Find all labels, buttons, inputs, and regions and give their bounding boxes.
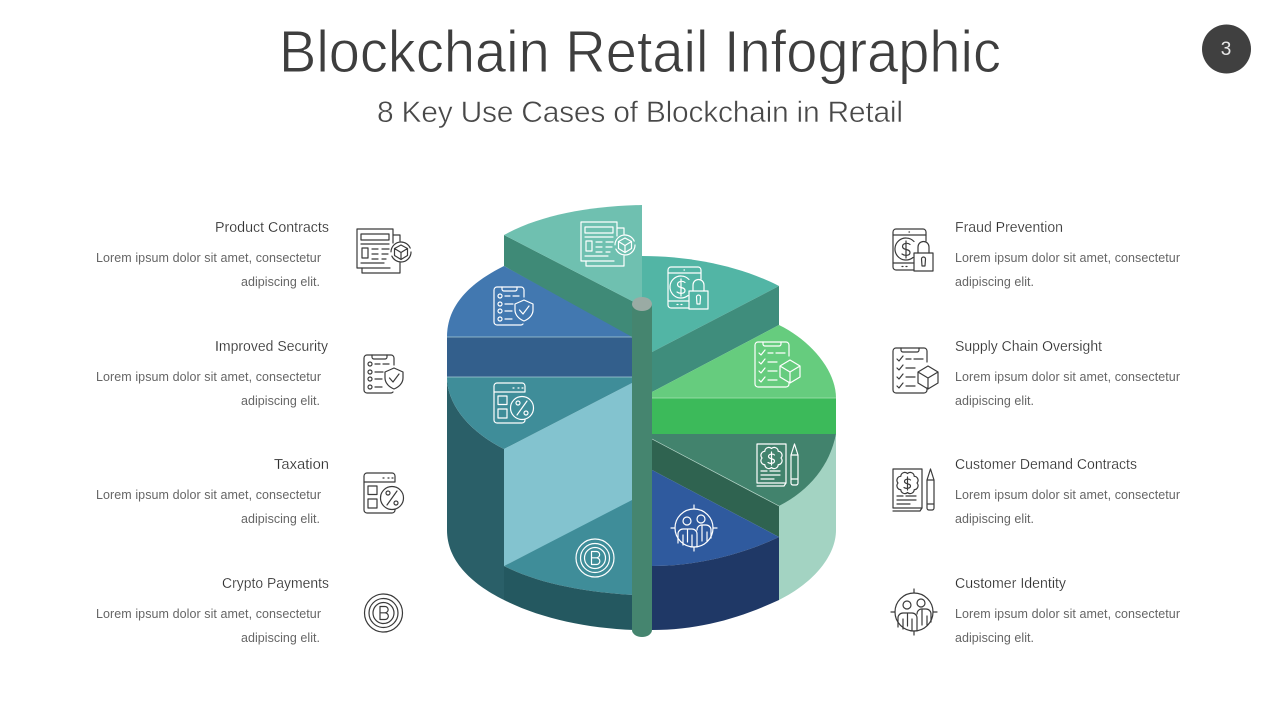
panel: product contracts: Product Contracts (215, 219, 329, 236)
panel: fraud prevention: Lorem ipsum dolor sit amet, consectetur (955, 251, 1180, 265)
segment: improved security (447, 266, 634, 377)
icon: improved security (364, 355, 403, 393)
panel: improved security: Improved Security (215, 338, 328, 355)
panel: customer identity: Customer Identity (955, 575, 1066, 592)
panel: customer identity: Lorem ipsum dolor sit amet, consectetur (955, 607, 1180, 621)
panel: customer demand contracts: Customer Demand Contracts (955, 456, 1137, 473)
page number badge (1202, 24, 1251, 74)
panel: product contracts: Lorem ipsum dolor sit amet, consectetur (96, 251, 321, 265)
panel: supply chain oversight: Lorem ipsum dolor sit amet, consectetur (955, 370, 1180, 384)
panel: supply chain oversight (955, 338, 1180, 408)
panel: crypto payments: Crypto Payments (222, 575, 329, 592)
panel: taxation: adipiscing elit. (241, 512, 320, 526)
segment: customer identity (652, 470, 779, 630)
icon: identity white (671, 505, 717, 551)
panel: improved security (96, 338, 328, 408)
central pillar (632, 297, 652, 637)
panel: customer demand contracts: Lorem ipsum dolor sit amet, consectetur (955, 488, 1180, 502)
panel: customer identity (955, 575, 1180, 645)
page number badge: 3 (1221, 39, 1231, 60)
icon: product contracts (357, 229, 411, 273)
panel: customer demand contracts (955, 456, 1180, 526)
icon: fraud white (668, 267, 708, 309)
panel: supply chain oversight: adipiscing elit. (955, 394, 1034, 408)
panel: crypto payments (96, 575, 329, 645)
icon: demand white (757, 444, 798, 486)
panel: 3D segmented cylinder (447, 205, 836, 637)
icon: contracts white (581, 222, 635, 266)
icon: taxation (364, 473, 404, 513)
segment: fraud prevention (642, 256, 779, 392)
segment: taxation (447, 377, 634, 449)
icon: crypto payments (364, 594, 402, 632)
icon: fraud prevention (893, 229, 933, 271)
panel: taxation: Taxation (274, 456, 329, 473)
panel: crypto payments: Lorem ipsum dolor sit amet, consectetur (96, 607, 321, 621)
panel: customer identity: adipiscing elit. (955, 631, 1034, 645)
icon: crypto white (576, 539, 614, 577)
panel: improved security: Lorem ipsum dolor sit amet, consectetur (96, 370, 321, 384)
panel: customer demand contracts: adipiscing elit. (955, 512, 1034, 526)
panel: fraud prevention (955, 219, 1180, 289)
segment: customer demand contracts (652, 434, 836, 600)
segment: product contracts (504, 205, 642, 338)
segment: supply chain oversight (652, 325, 836, 434)
subtitle: 8 Key Use Cases of Blockchain in Retail (377, 96, 903, 129)
panel: fraud prevention: Fraud Prevention (955, 219, 1063, 236)
panel: improved security: adipiscing elit. (241, 394, 320, 408)
panel: taxation (96, 456, 329, 526)
icon: tax white (494, 383, 534, 423)
panel: taxation: Lorem ipsum dolor sit amet, consectetur (96, 488, 321, 502)
segment: crypto payments (447, 377, 634, 630)
panel: product contracts: adipiscing elit. (241, 275, 320, 289)
panel: product contracts (96, 219, 329, 289)
icon: supply chain oversight (893, 348, 938, 393)
title: Blockchain Retail Infographic (279, 19, 1001, 85)
panel: supply chain oversight: Supply Chain Oversight (955, 338, 1103, 355)
panel: fraud prevention: adipiscing elit. (955, 275, 1034, 289)
icon: customer identity (891, 589, 937, 635)
icon: security white (494, 287, 533, 325)
icon: customer demand contracts (893, 469, 934, 511)
panel: crypto payments: adipiscing elit. (241, 631, 320, 645)
icon: supply white (755, 342, 800, 387)
